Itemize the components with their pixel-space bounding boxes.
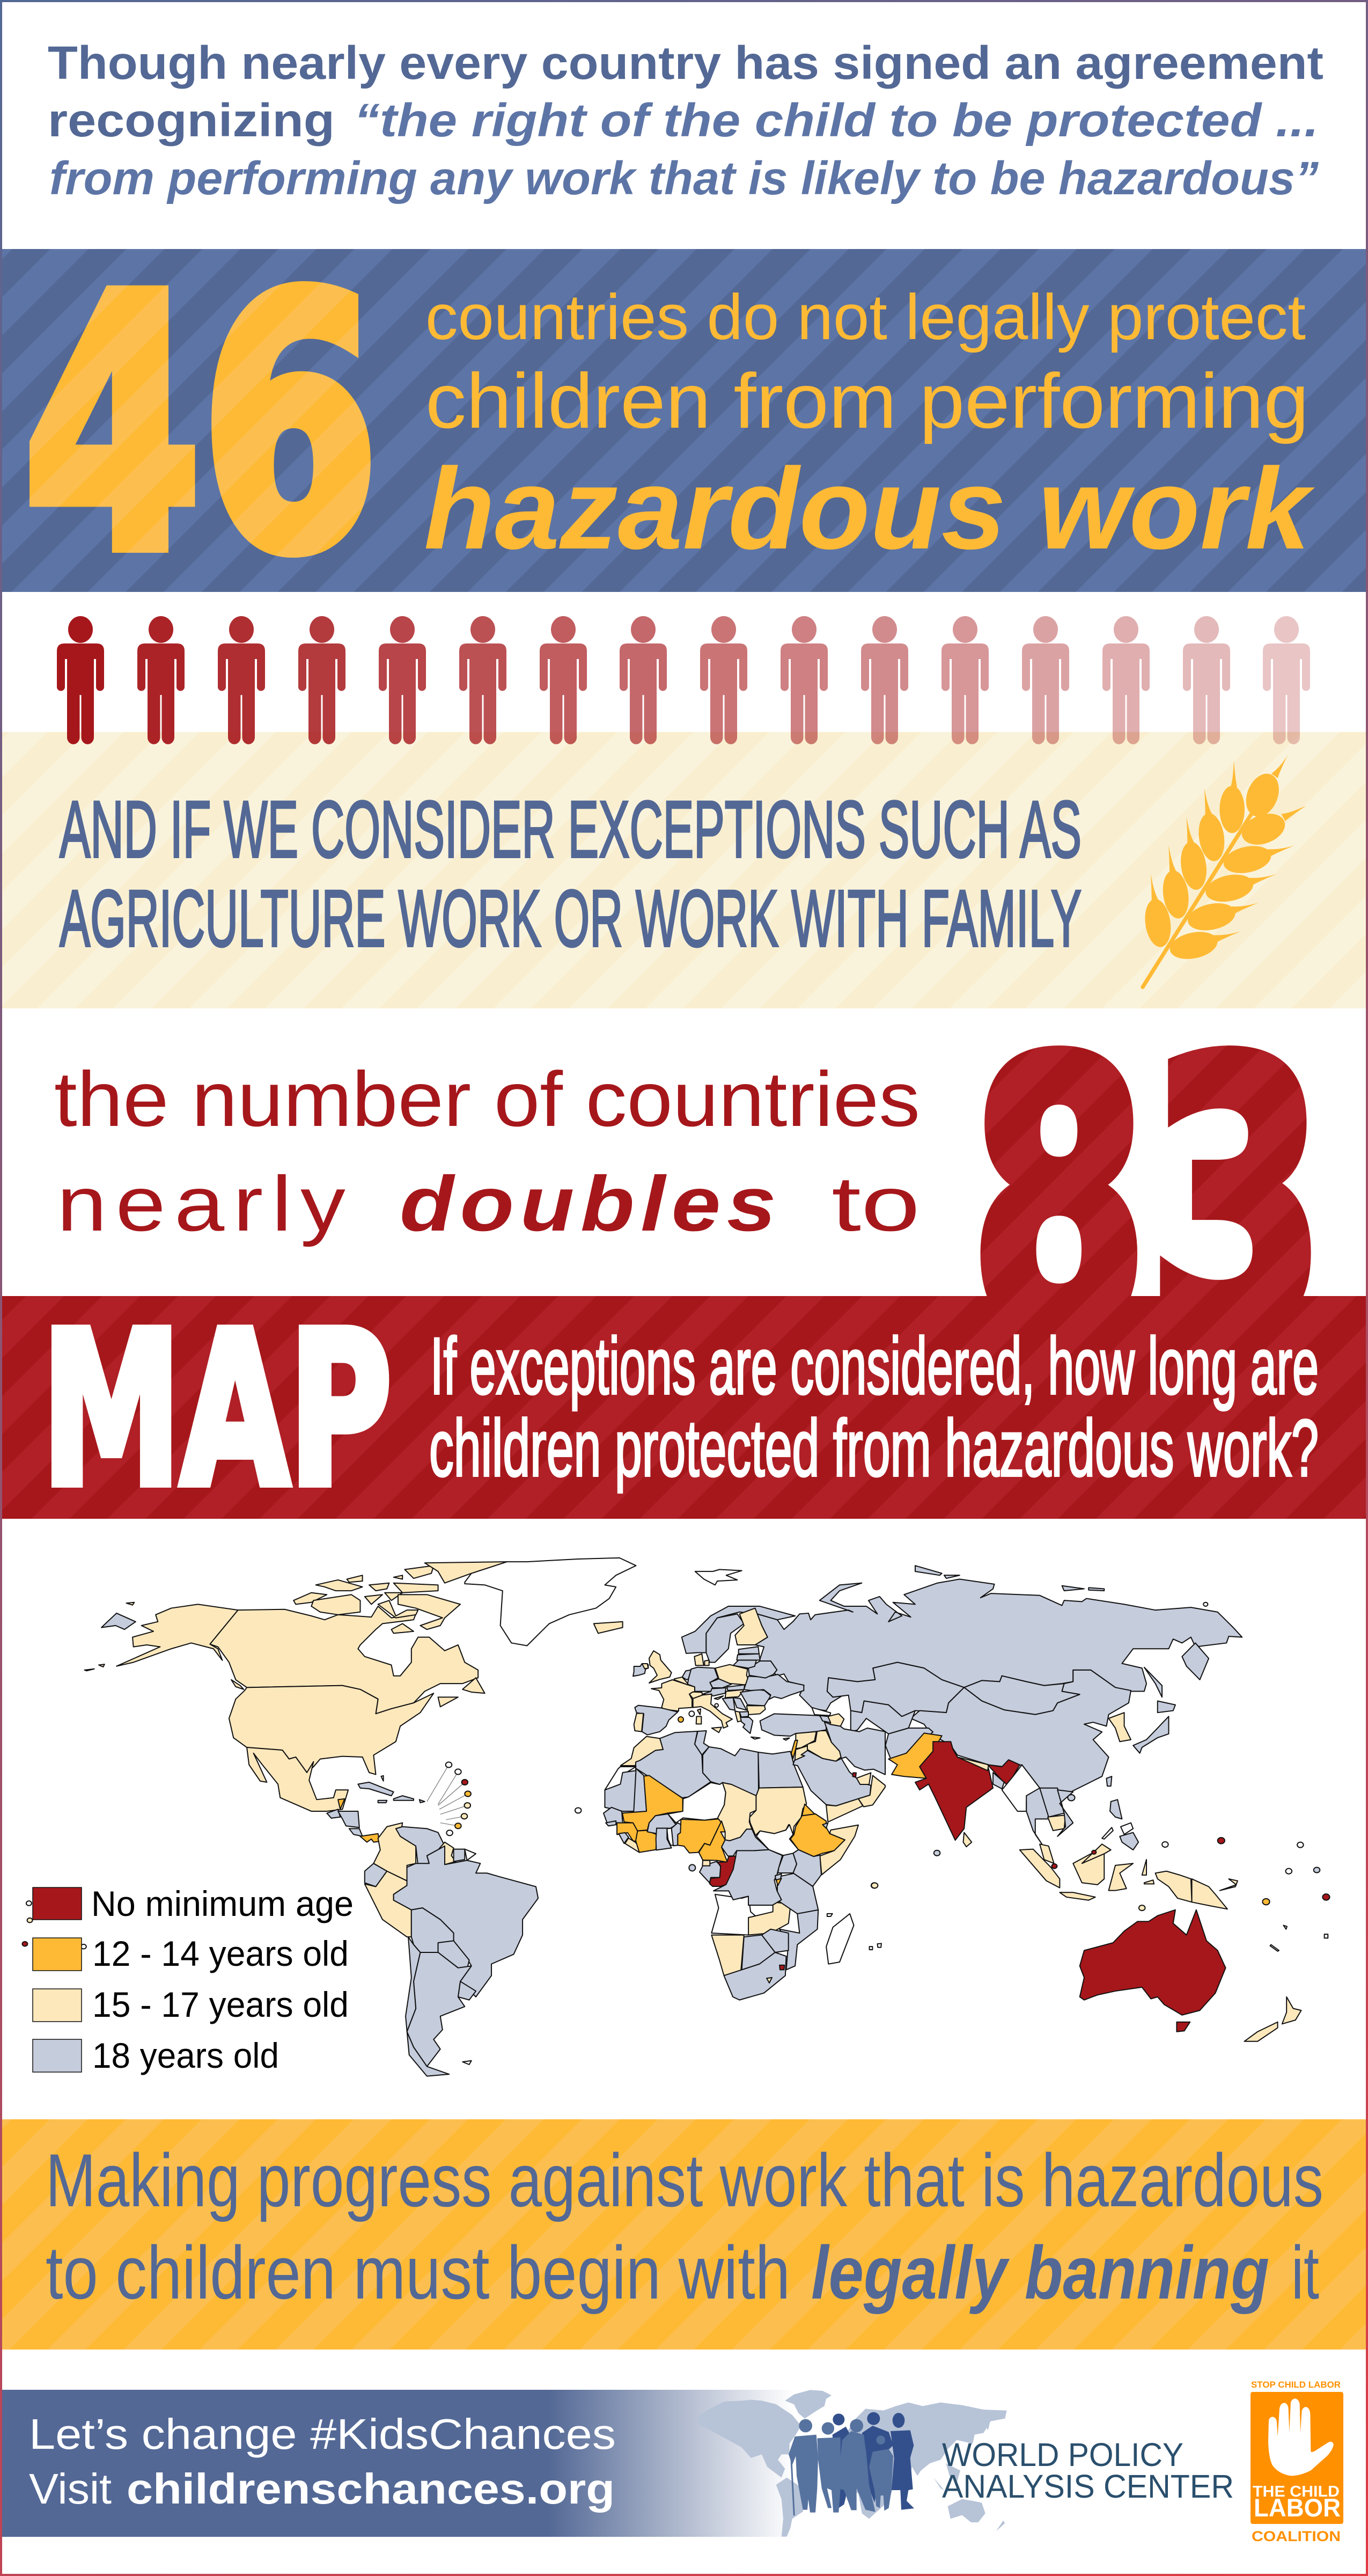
text: nearly doubles to: to [832, 1160, 920, 1247]
logo bottom text: COALITION [1252, 2528, 1341, 2544]
text: to children must begin with legally banning it [46, 2230, 1319, 2315]
footer text: visit website: childrenschances.org [127, 2465, 615, 2513]
text: nearly doubles to [57, 1160, 920, 1247]
text: to children must begin with legally banning it: to children must begin with [46, 2230, 790, 2315]
legend: 18 years old: 18 years old [92, 2036, 279, 2075]
panel: 46 countries band [0, 224, 1368, 627]
map legend [33, 1884, 354, 2075]
legend: 12 - 14 years old: 12 - 14 years old [92, 1934, 349, 1973]
icon: raised hand [1268, 2398, 1334, 2476]
logo: World Policy Analysis Center [697, 2390, 1234, 2537]
logo text: the child labor: LABOR [1254, 2493, 1341, 2522]
panel: agriculture exceptions band [0, 732, 1368, 1008]
panel: number doubles [54, 1056, 920, 1247]
map region: Russia and Asia [682, 1565, 1330, 2041]
legend: no minimum age: No minimum age [91, 1884, 354, 1923]
heading line 3: from performing any work that is likely to be hazardous” [49, 152, 1319, 204]
logo text: the child labor: THE CHILD [1253, 2483, 1340, 2500]
icon: wheat [1142, 755, 1306, 987]
logo text: WORLD POLICY [942, 2436, 1183, 2473]
panel: intro quote [48, 37, 1323, 204]
text: to children must begin with legally banning it: legally banning [811, 2230, 1269, 2315]
heading line 2 [48, 94, 1319, 147]
logo text [942, 2436, 1234, 2505]
text: hazardous work: hazardous work [424, 444, 1315, 573]
heading line 2: “the right of the child to be protected ... [354, 94, 1319, 147]
logo text: ANALYSIS CENTER [942, 2468, 1234, 2505]
logo orange block [1251, 2392, 1343, 2524]
text: nearly doubles to: nearly [57, 1160, 354, 1247]
heading line 2: recognizing [48, 94, 335, 147]
footer band [0, 2390, 794, 2537]
text: to children must begin with legally banning it: it [1291, 2230, 1319, 2315]
panel: call to action band [0, 2119, 1368, 2350]
big number 46: 46 [24, 224, 379, 627]
text: the number of countries: the number of countries [54, 1056, 920, 1143]
text: children from performing: children from performing [425, 357, 1309, 444]
icon row: sixteen fading child figures [57, 616, 1310, 744]
logo map and people [697, 2390, 1007, 2537]
map region: Europe, Africa and Middle East [617, 1646, 885, 1905]
footer text: visit website: Visit [29, 2465, 112, 2513]
choropleth world map [22, 1558, 1330, 2076]
logo: Child Labor Coalition [1251, 2380, 1343, 2544]
heading: MAP: MAP [42, 1288, 392, 1533]
text: countries do not legally protect: countries do not legally protect [425, 281, 1306, 353]
text: nearly doubles to: doubles [400, 1160, 782, 1247]
heading line 1: Though nearly every country has signed an agreement [48, 37, 1323, 89]
map region: Americas [22, 1558, 636, 2076]
panel: map band [2, 1045, 1366, 1519]
logo top text: STOP CHILD LABOR [1251, 2380, 1341, 2390]
footer text: hashtag: Let’s change #KidsChances [29, 2410, 616, 2458]
legend: 15 - 17 years old: 15 - 17 years old [92, 1985, 349, 2024]
